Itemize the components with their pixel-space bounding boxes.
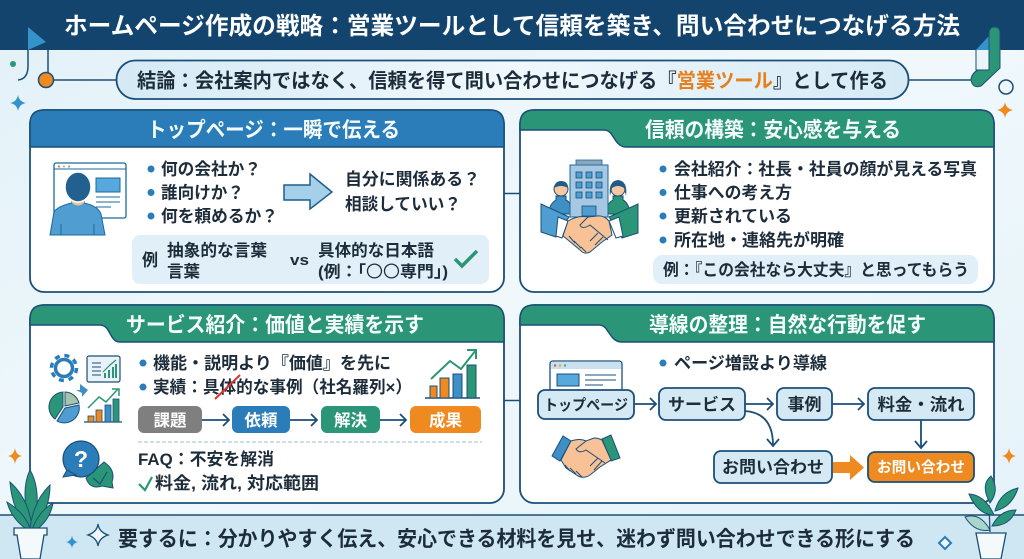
illustration: right plant (965, 476, 1018, 559)
text: FAQ (138, 450, 319, 493)
panel header: trust: 信頼の構築：安心感を与える (645, 118, 901, 142)
example box: abstract vs concrete: 言葉 (167, 262, 200, 281)
panel header: services: サービス紹介：価値と実績を示す (126, 314, 424, 337)
panel header: top page: トップページ：一瞬で伝える (147, 119, 400, 142)
bullet list: value and results (140, 353, 412, 399)
process flow: issue to result: 依頼 (244, 411, 278, 430)
icon: handshake (552, 435, 620, 477)
arrow: to visitor reaction (284, 174, 332, 209)
flow chart: navigation path: サービス (668, 394, 736, 414)
conclusion banner (116, 60, 908, 99)
bullet list: trust factors: 会社紹介：社長・社員の顔が見える写真 (674, 159, 977, 179)
panel: top page (30, 110, 504, 292)
decoration: orange sparkles (8, 448, 1016, 464)
icon: browser window (550, 361, 622, 393)
flow chart: navigation path: 料金・流れ (878, 394, 964, 414)
bullet list: questions: 何を頼めるか？ (161, 207, 278, 226)
bullet list: questions: 何の会社か？ (161, 160, 261, 179)
bullet: pages vs flow: ページ増設より導線 (674, 353, 827, 373)
flow chart: navigation path: お問い合わせ (877, 459, 965, 476)
example box: abstract vs concrete: 例 (142, 251, 158, 270)
example box: abstract vs concrete: 具体的な日本語 (318, 241, 435, 260)
footer summary band: 要するに：分かりやすく伝え、安心できる材料を見せ、迷わず問い合わせできる形にする (118, 528, 915, 551)
panel: user flow (520, 305, 994, 503)
text: visitor reaction: 自分に関係ある？ (345, 169, 480, 189)
icon: FAQ speech bubbles (63, 441, 113, 488)
connector lines between panels (504, 194, 520, 400)
illustration: left plant (7, 470, 53, 559)
panel: trust (520, 110, 994, 292)
icon: building, staff and handshake (541, 160, 638, 253)
panel header: user flow (520, 305, 994, 342)
flow chart: navigation path (538, 388, 974, 483)
process flow: issue to result (138, 406, 481, 433)
panel header: trust (520, 110, 994, 147)
bullet list: questions (148, 160, 278, 226)
example box: abstract vs concrete (132, 235, 489, 284)
process flow: issue to result: 成果 (429, 410, 462, 430)
conclusion banner: 結論：会社案内ではなく、信頼を得て問い合わせにつなげる『営業ツール』として作る (137, 70, 888, 92)
panel: services (30, 305, 504, 503)
title banner: ホームページ作成の戦略：営業ツールとして信頼を築き、問い合わせにつなげる方法 (64, 13, 960, 40)
decoration: flag and connector left (10, 27, 116, 111)
footer summary band (0, 515, 1024, 559)
title banner (0, 0, 1024, 50)
bullet list: value and results: 実績：具体的な事例（社名羅列×） (153, 378, 412, 397)
process flow: issue to result: 課題 (154, 411, 187, 430)
panel header: top page (30, 110, 504, 147)
example box: abstract vs concrete: vs (290, 252, 309, 269)
flow chart: navigation path: トップページ (544, 397, 628, 414)
example box: abstract vs concrete: 抽象的な言葉 (167, 240, 268, 260)
icon: FAQ speech bubbles: ? (74, 446, 88, 472)
icon: gear, report, pie chart and growth chart (49, 356, 122, 423)
icon: person viewing website (50, 163, 126, 235)
chart: growth bars (425, 350, 480, 398)
example box: abstract vs concrete: (例：「〇〇専門」) (318, 262, 448, 281)
bullet list: trust factors: 仕事への考え方 (674, 182, 792, 202)
bullet list: trust factors: 更新されている (674, 207, 792, 226)
bullet list: trust factors (660, 159, 977, 250)
flow chart: navigation path: お問い合わせ (722, 458, 824, 477)
text: FAQ: FAQ：不安を解消 (138, 450, 274, 469)
example box: trust: 例：『この会社なら大丈夫』と思ってもらう (663, 260, 969, 280)
text: visitor reaction: 相談していい？ (345, 195, 461, 214)
panel header: services (30, 305, 504, 342)
decoration: footer stars (66, 524, 951, 549)
example box: trust (653, 255, 978, 284)
text: FAQ: 料金, 流れ, 対応範囲 (155, 473, 319, 493)
bullet list: questions: 誰向けか？ (161, 184, 244, 202)
process flow: issue to result: 解決 (334, 411, 368, 430)
flow chart: navigation path: 事例 (788, 396, 822, 414)
panel header: user flow: 導線の整理：自然な行動を促す (649, 313, 926, 337)
text: visitor reaction (345, 169, 480, 214)
decoration: bookmark and connector right (909, 27, 1013, 118)
bullet list: trust factors: 所在地・連絡先が明確 (674, 230, 844, 250)
bullet list: value and results: 機能・説明より『価値』を先に (153, 353, 391, 373)
